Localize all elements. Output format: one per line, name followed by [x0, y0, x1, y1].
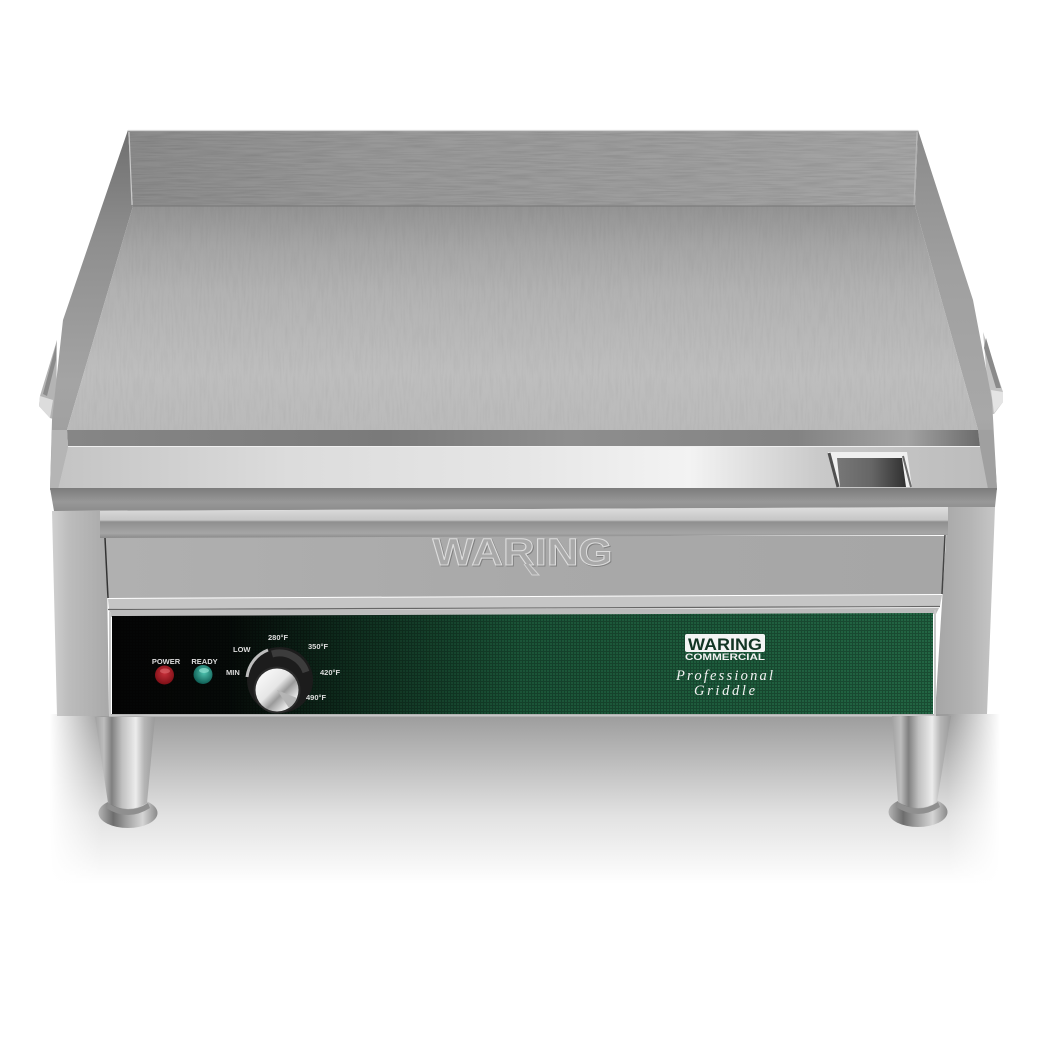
right side handle	[983, 332, 1003, 414]
product name	[675, 668, 773, 699]
power indicator	[152, 657, 181, 684]
right leg	[888, 716, 951, 827]
griddle cooking surface	[67, 206, 978, 430]
temperature scale: LOW	[233, 645, 251, 654]
left side handle	[39, 340, 57, 420]
left splash wall	[50, 130, 133, 490]
left side panel	[52, 511, 109, 716]
control panel	[110, 610, 935, 716]
temperature scale: 490°F	[306, 693, 327, 702]
right side panel	[935, 507, 995, 714]
right splash wall	[915, 130, 997, 490]
temperature scale: MIN	[226, 668, 240, 677]
Waring Commercial badge	[685, 634, 766, 662]
ready indicator	[191, 657, 218, 684]
product name: Professional	[675, 668, 773, 684]
Waring Commercial badge: COMMERCIAL	[685, 652, 766, 662]
griddle product illustration	[39, 130, 1003, 864]
Waring Commercial badge: WARING	[688, 635, 762, 654]
grease drawer opening	[828, 452, 912, 487]
embossed WARING logo: WARING	[434, 533, 614, 575]
left leg	[95, 717, 158, 828]
ready indicator: READY	[191, 657, 218, 666]
griddle front edge	[67, 430, 980, 447]
floor shadow	[50, 714, 1000, 884]
front lip	[50, 488, 997, 511]
temperature scale	[226, 633, 341, 702]
temperature scale: 420°F	[320, 668, 341, 677]
back splash wall	[128, 130, 918, 206]
temperature scale: 350°F	[308, 642, 329, 651]
upper front panel with embossed logo	[105, 532, 945, 598]
temperature scale: 280°F	[268, 633, 289, 642]
grease tray shelf	[50, 430, 997, 489]
power indicator: POWER	[152, 657, 181, 666]
top trim rail	[100, 507, 948, 538]
product name: Griddle	[694, 683, 756, 699]
embossed WARING logo: WARING	[432, 532, 612, 574]
middle trim strips	[108, 595, 942, 617]
thermostat dial	[247, 647, 313, 714]
